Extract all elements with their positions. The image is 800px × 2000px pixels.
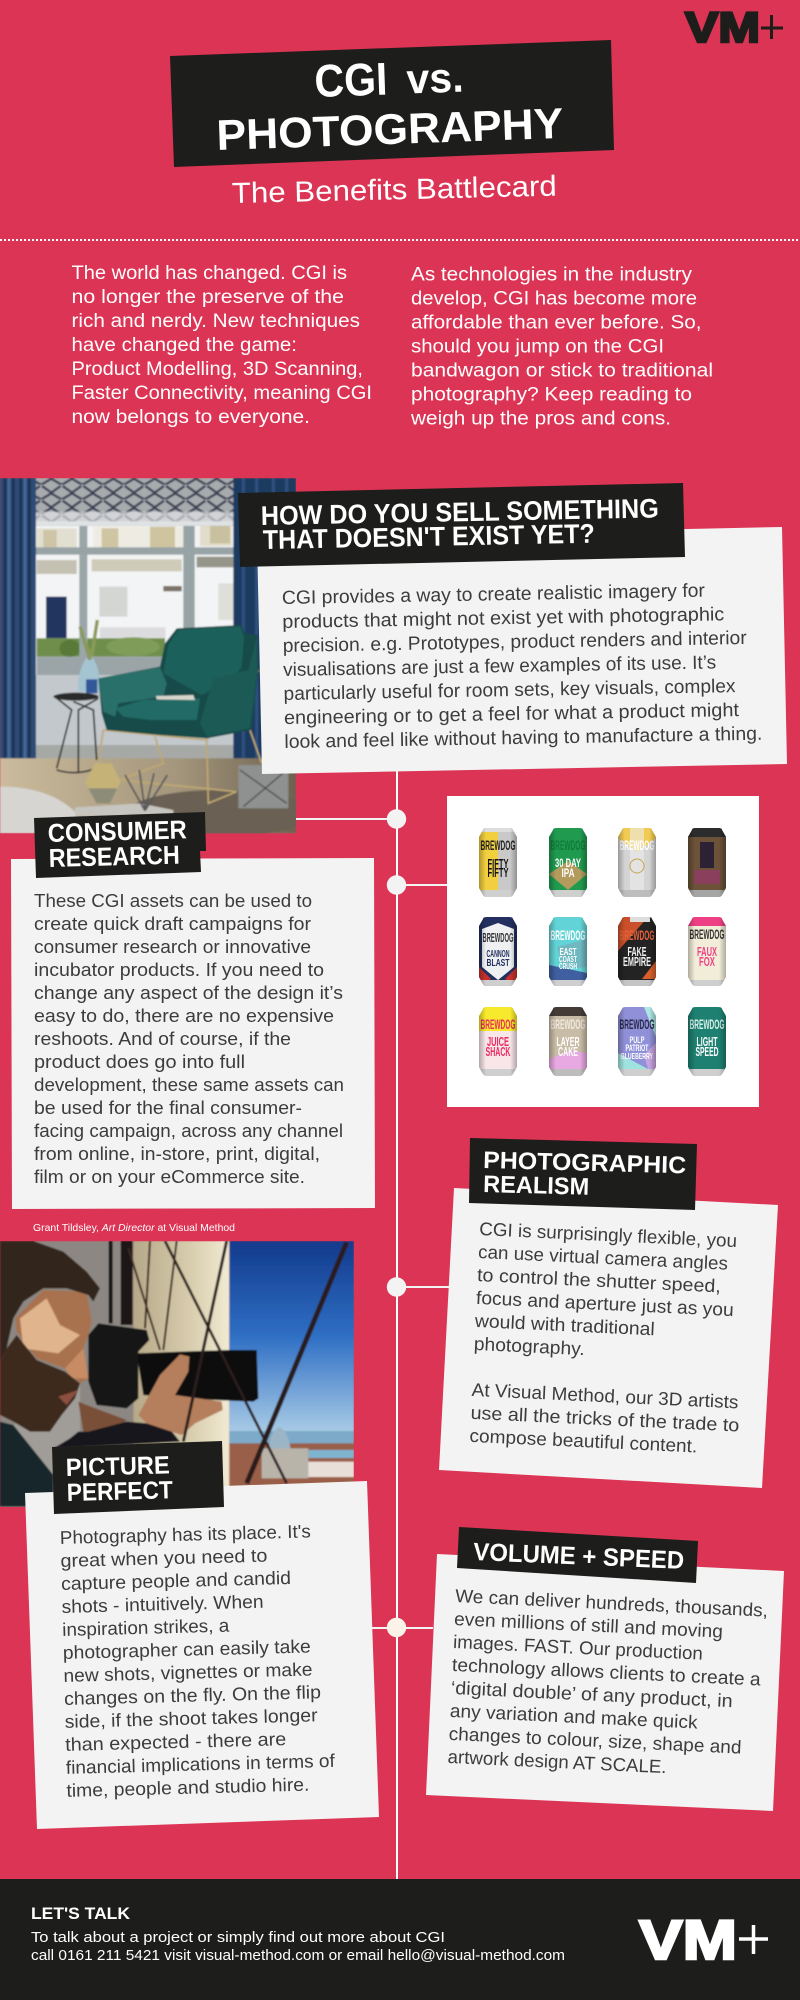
can: Juice Shack: BREWDOG (480, 1017, 516, 1032)
body text: CGI provides a way to create realistic imagery for (282, 581, 706, 609)
can: silver: BREWDOG (620, 838, 654, 853)
intro text: left column: have changed the game: (72, 335, 297, 356)
logo: VM+ footer: VM (639, 1908, 737, 1971)
body text: incubator products. If you need to (34, 959, 324, 980)
body text: time, people and studio hire. (66, 1774, 310, 1801)
body text: facing campaign, across any channel (34, 1120, 343, 1141)
can: 30 Day IPA: BREWDOG (550, 838, 586, 853)
body text: images. FAST. Our production (453, 1631, 703, 1664)
body text: changes to colour, size, shape and (448, 1723, 742, 1758)
body text (282, 580, 763, 753)
can: Juice Shack (479, 1007, 517, 1076)
heading banner (469, 1138, 697, 1210)
body text: ‘digital double’ of any product, in (450, 1677, 733, 1711)
heading banner: CONSUMER (47, 814, 187, 848)
intro text: left column (72, 263, 372, 428)
intro text: left column: Product Modelling, 3D Scanning, (72, 359, 363, 380)
photo credit caption: Grant Tildsley, Art Director at Visual Method (33, 1222, 235, 1234)
can: Light Speed: LIGHT (696, 1035, 718, 1049)
can: silver (618, 828, 656, 897)
panel background (11, 858, 375, 1209)
body text (34, 890, 344, 1187)
body text: inspiration strikes, a (62, 1615, 230, 1640)
title banner (170, 40, 614, 167)
body text: create quick draft campaigns for (34, 913, 311, 934)
body text: even millions of still and moving (454, 1608, 723, 1642)
intro text: right column: As technologies in the industry (411, 264, 693, 286)
footer contact text: call 0161 211 5421 visit visual-method.com or email hello@visual-method.com (31, 1948, 565, 1964)
body text: development, these same assets can (34, 1074, 344, 1095)
body text: These CGI assets can be used to (34, 890, 312, 911)
body text: from online, in-store, print, digital, (34, 1143, 320, 1164)
can: Layer Cake (549, 1007, 587, 1076)
body text: We can deliver hundreds, thousands, (455, 1585, 768, 1621)
panel background (25, 1481, 379, 1829)
body text: products that might not exist yet with photographic (282, 604, 724, 633)
body text: can use virtual camera angles (478, 1241, 728, 1274)
body text: film or on your eCommerce site. (34, 1166, 305, 1187)
panel background (426, 1554, 784, 1811)
panel: consumer research (11, 812, 375, 1209)
heading banner (238, 483, 685, 567)
body text (60, 1520, 337, 1801)
body text: compose beautiful content. (469, 1425, 698, 1457)
can: Fifty Fifty: FIFTY (488, 856, 509, 871)
body text: financial implications in terms of (66, 1750, 336, 1778)
body text: would with traditional (473, 1310, 655, 1339)
can: East Coast Crush: COAST (559, 955, 577, 964)
body text: easy to do, there are no expensive (34, 1005, 334, 1026)
body text: changes on the fly. On the flip (64, 1681, 321, 1709)
heading banner: THAT DOESN'T EXIST YET? (263, 519, 595, 555)
body text: focus and aperture just as you (476, 1287, 734, 1320)
body text: than expected - there are (65, 1728, 286, 1755)
can: Layer Cake: CAKE (558, 1045, 578, 1059)
heading banner: RESEARCH (48, 840, 180, 873)
can: Fifty Fifty (479, 828, 517, 897)
can: Pulp Patriot Blueberry: PULP (630, 1035, 644, 1045)
body text: be used for the final consumer- (34, 1097, 302, 1118)
subtitle: The Benefits Battlecard (231, 171, 557, 210)
panel background (257, 527, 787, 774)
can: Juice Shack: JUICE (487, 1035, 509, 1049)
body text (468, 1218, 749, 1458)
body text: particularly useful for room sets, key visuals, complex (283, 676, 736, 705)
body text: photography. (473, 1333, 585, 1359)
intro text: left column: now belongs to everyone. (72, 407, 310, 428)
footer contact text: To talk about a project or simply find out more about CGI (31, 1930, 445, 1946)
panel background (439, 1188, 778, 1488)
title banner: CGI (314, 52, 388, 107)
heading banner: PERFECT (66, 1476, 173, 1507)
can: Light Speed: BREWDOG (690, 1017, 724, 1032)
body text: side, if the shoot takes longer (64, 1704, 318, 1732)
intro text: right column: affordable than ever before. So, (411, 312, 702, 334)
can: Cannon Blast: BLAST (486, 958, 510, 969)
body text: change any aspect of the design it’s (34, 982, 343, 1003)
intro text: right column: photography? Keep reading to (411, 384, 692, 406)
footer band (0, 1879, 800, 2000)
intro text: right column: weigh up the pros and cons. (410, 408, 671, 430)
body text: precision. e.g. Prototypes, product renders and interior (283, 628, 748, 657)
body text: visualisations are just a few examples of its use. It’s (283, 652, 716, 681)
body text: photographer can easily take (63, 1635, 311, 1663)
photo: photographer with camera (0, 1241, 354, 1508)
can: East Coast Crush (549, 917, 587, 987)
intro text: left column: rich and nerdy. New techniques (72, 311, 360, 332)
can: 30 Day IPA: 30 DAY (555, 856, 581, 870)
can: Pulp Patriot Blueberry: PATRIOT (626, 1043, 649, 1053)
body text: technology allows clients to create a (452, 1654, 762, 1690)
body text: consumer research or innovative (34, 936, 311, 957)
panel: product cans image (447, 796, 759, 1107)
can: Faux Fox: FOX (699, 954, 715, 969)
can: 30 Day IPA: IPA (562, 866, 575, 880)
body text: any variation and make quick (449, 1700, 699, 1733)
can: Faux Fox (688, 917, 726, 987)
can: East Coast Crush: BREWDOG (550, 928, 586, 943)
title banner: PHOTOGRAPHY (216, 100, 564, 160)
footer contact text (31, 1930, 565, 1964)
intro text: left column: Faster Connectivity, meaning CGI (72, 383, 372, 404)
logo: VM+ top (685, 4, 783, 52)
intro text: left column: The world has changed. CGI is (72, 263, 347, 284)
heading banner: REALISM (483, 1171, 590, 1201)
can: Faux Fox: FAUX (697, 944, 717, 959)
can: Juice Shack: SHACK (486, 1045, 510, 1059)
can: Fake Empire: FAKE (628, 945, 646, 959)
body text: to control the shutter speed, (477, 1264, 721, 1296)
can: Light Speed (688, 1007, 726, 1076)
panel: picture perfect (25, 1441, 379, 1829)
body text: great when you need to (60, 1545, 268, 1571)
can: Cannon Blast: BREWDOG (482, 931, 514, 945)
timeline: connector line and nodes (296, 770, 449, 1879)
panel: volume + speed (426, 1527, 784, 1811)
heading banner: VOLUME + SPEED (473, 1538, 685, 1575)
can: Cannon Blast: CANNON (486, 949, 510, 960)
can: Pulp Patriot Blueberry: BREWDOG (620, 1017, 654, 1032)
heading banner (457, 1527, 698, 1583)
heading banner: PICTURE (65, 1451, 170, 1482)
panel: photographic realism (439, 1138, 778, 1488)
body text: capture people and candid (61, 1567, 291, 1594)
body text: new shots, vignettes or make (63, 1658, 313, 1686)
can: Pulp Patriot Blueberry: BLUEBERRY (621, 1051, 653, 1061)
can: Fifty Fifty: FIFTY (488, 865, 509, 880)
can: Fake Empire (618, 917, 656, 987)
body text (447, 1585, 768, 1782)
intro text: left column: no longer the preserve of the (72, 287, 344, 308)
heading banner: PHOTOGRAPHIC (483, 1147, 686, 1179)
can: Layer Cake: LAYER (556, 1035, 580, 1049)
footer heading: LET'S TALK (31, 1905, 130, 1923)
body text: use all the tricks of the trade to (470, 1402, 740, 1435)
heading banner (52, 1441, 224, 1514)
logo: VM+ top: VM (685, 4, 760, 52)
heading banner: HOW DO YOU SELL SOMETHING (261, 493, 659, 531)
can: Fake Empire: BREWDOG (620, 928, 654, 943)
body text: Photography has its place. It's (60, 1520, 311, 1548)
can: Layer Cake: BREWDOG (550, 1017, 586, 1032)
can: Fake Empire: EMPIRE (623, 955, 651, 969)
heading banner (34, 812, 206, 878)
panel: how do you sell something (238, 483, 787, 774)
intro text: right column: should you jump on the CGI (411, 336, 664, 358)
intro text: right column (410, 264, 713, 430)
can: 30 Day IPA (549, 828, 587, 897)
logo: VM+ footer (639, 1908, 768, 1971)
body text: At Visual Method, our 3D artists (471, 1379, 739, 1412)
photo: CGI interior with teal armchair (0, 478, 313, 837)
body text: CGI is surprisingly flexible, you (479, 1218, 738, 1251)
body text: artwork design AT SCALE. (447, 1746, 667, 1777)
can: East Coast Crush: EAST (560, 947, 576, 958)
body text: engineering or to get a feel for what a product might (284, 700, 740, 729)
can: Light Speed: SPEED (696, 1045, 718, 1059)
can: East Coast Crush: CRUSH (559, 962, 577, 971)
body text: product does go into full (34, 1051, 245, 1072)
intro text: right column: develop, CGI has become more (411, 288, 697, 310)
can: dark illustrated (688, 828, 726, 897)
body text: reshoots. And of course, if the (34, 1028, 291, 1049)
can: Fifty Fifty: BREWDOG (480, 838, 516, 853)
title banner: vs. (406, 54, 464, 102)
intro text: right column: bandwagon or stick to traditional (411, 360, 713, 382)
body text: look and feel like without having to manufacture a thing. (284, 724, 763, 753)
can: Cannon Blast (479, 917, 517, 987)
can: Faux Fox: BREWDOG (690, 927, 724, 942)
can: Pulp Patriot Blueberry (618, 1007, 656, 1076)
body text: shots - intuitively. When (61, 1591, 264, 1617)
